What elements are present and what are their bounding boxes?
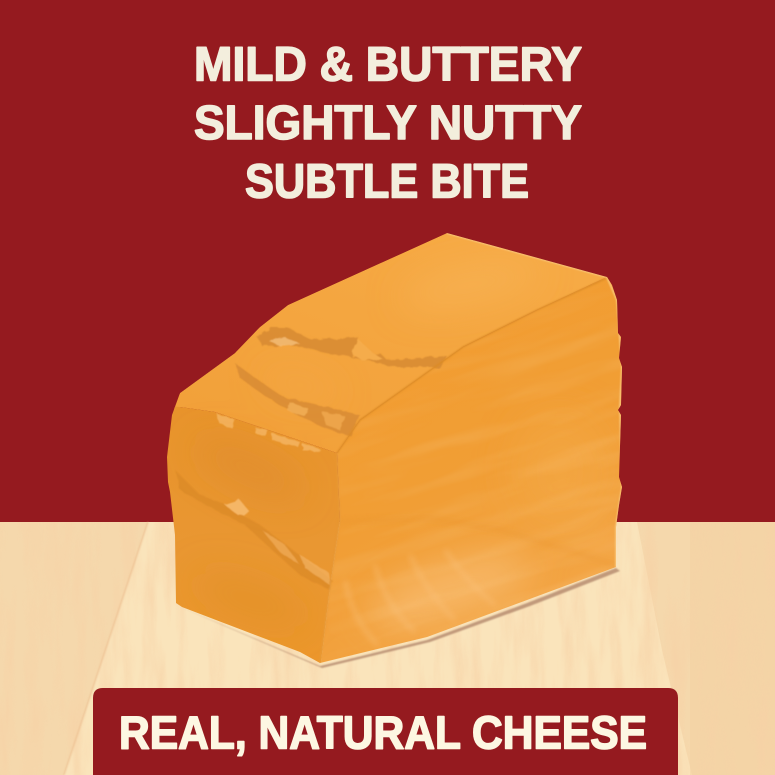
headline: flavour description — [194, 38, 582, 208]
centre wood plank — [64, 522, 692, 775]
cheese shadow — [178, 568, 620, 668]
cheese fold across right face — [340, 518, 616, 565]
headline: flavour description: MILD & BUTTERY — [194, 38, 582, 92]
cheese top face — [172, 233, 607, 453]
cheese left face — [160, 405, 340, 670]
headline: flavour description: SLIGHTLY NUTTY — [194, 96, 582, 150]
cheese edge lines — [320, 278, 607, 663]
cheese soft light patches — [364, 270, 536, 638]
plank seam left — [64, 522, 148, 775]
cheese grain streaks right face — [333, 329, 620, 616]
crumbled ridge lower edge highlights — [216, 413, 320, 452]
cheese crack in left face — [175, 470, 332, 590]
cheese right face — [320, 277, 625, 670]
wooden table surface — [0, 522, 775, 775]
darker far-right plank shading — [690, 522, 775, 775]
crumbled ridge middle — [235, 363, 360, 437]
bottom banner — [93, 688, 678, 775]
cheese rim light — [447, 233, 622, 567]
wood grain texture — [0, 522, 775, 775]
cheese fan marks at base — [345, 550, 495, 645]
red background panel — [0, 0, 775, 522]
crumbled ridge upper — [258, 328, 447, 367]
banner text: REAL, NATURAL CHEESE — [119, 706, 647, 758]
cheddar cheese block — [167, 233, 622, 663]
headline: flavour description: SUBTLE BITE — [245, 154, 529, 208]
